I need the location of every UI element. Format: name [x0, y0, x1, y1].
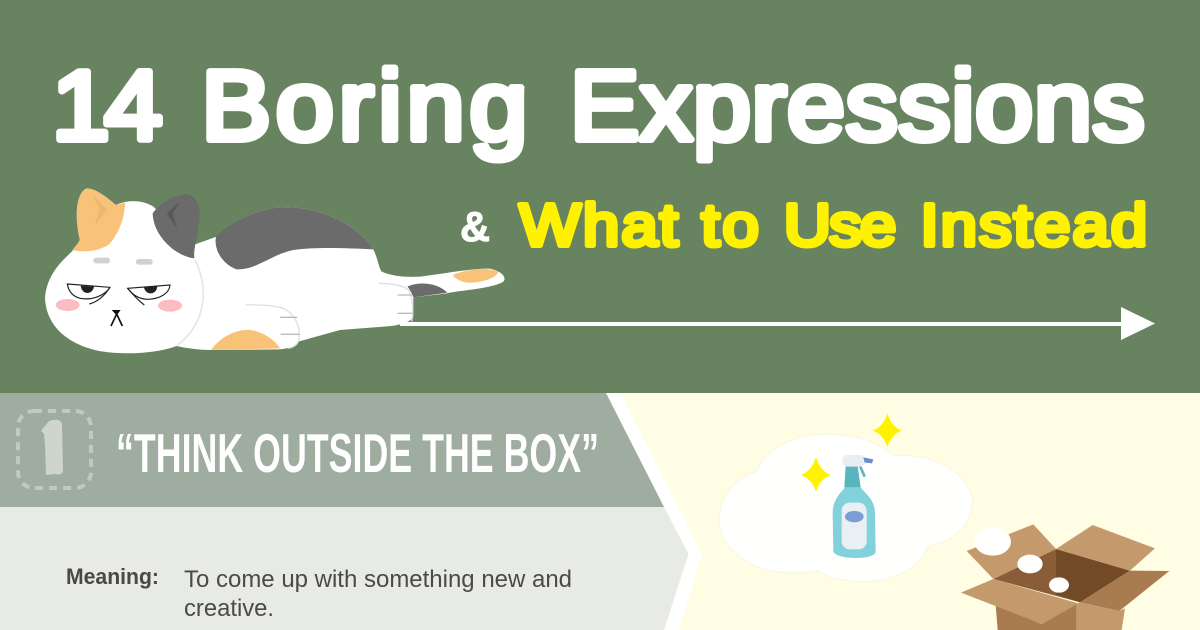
orange inner ear [93, 196, 107, 225]
head crease [177, 260, 203, 346]
thought bubbles [974, 528, 1069, 593]
arrow [400, 307, 1155, 340]
thought cloud [719, 434, 973, 582]
icon: sparkle left [801, 457, 831, 492]
subtitle: Use [784, 193, 896, 259]
cat body silhouette [45, 188, 505, 353]
panel: illustration background [600, 393, 1200, 630]
back paw [378, 283, 413, 322]
orange ear patch [72, 188, 125, 251]
icon: cardboard box [961, 524, 1169, 630]
blush [56, 299, 182, 312]
meaning text: creative. [184, 595, 274, 622]
chevron divider [604, 393, 702, 630]
meaning text [184, 566, 572, 622]
subtitle [520, 193, 1147, 259]
icon: lying cat [45, 188, 505, 353]
back patch [216, 207, 373, 269]
meaning text: To come up with something new and [184, 566, 572, 593]
eyebrows [93, 258, 153, 265]
panel: header background [0, 0, 1200, 394]
icon: sparkle top [873, 413, 902, 447]
tail orange patch [453, 269, 498, 283]
belly patch [211, 330, 280, 350]
ampersand: & [460, 203, 490, 250]
dark inner ear [167, 202, 180, 229]
tail dark patch [407, 283, 447, 297]
left eye [67, 284, 110, 304]
title: Expressions [570, 52, 1145, 161]
title: Boring [202, 52, 527, 161]
heading: “THINK OUTSIDE THE BOX” [116, 422, 599, 484]
subtitle: to [702, 193, 759, 259]
front paw [246, 305, 299, 348]
right eye [128, 285, 170, 305]
illustration: thought cloud, bottle and box [719, 413, 1169, 630]
title [52, 52, 1145, 161]
subtitle: What [520, 193, 678, 259]
panel: expression heading band [0, 393, 664, 507]
icon: spray bottle [833, 455, 876, 558]
title: 14 [52, 52, 162, 161]
dark ear [153, 194, 200, 258]
nose and mouth [111, 310, 122, 326]
panel: meaning text background [0, 507, 688, 630]
meaning label: Meaning: [66, 564, 159, 589]
number badge [18, 411, 91, 488]
subtitle: Instead [920, 193, 1147, 259]
